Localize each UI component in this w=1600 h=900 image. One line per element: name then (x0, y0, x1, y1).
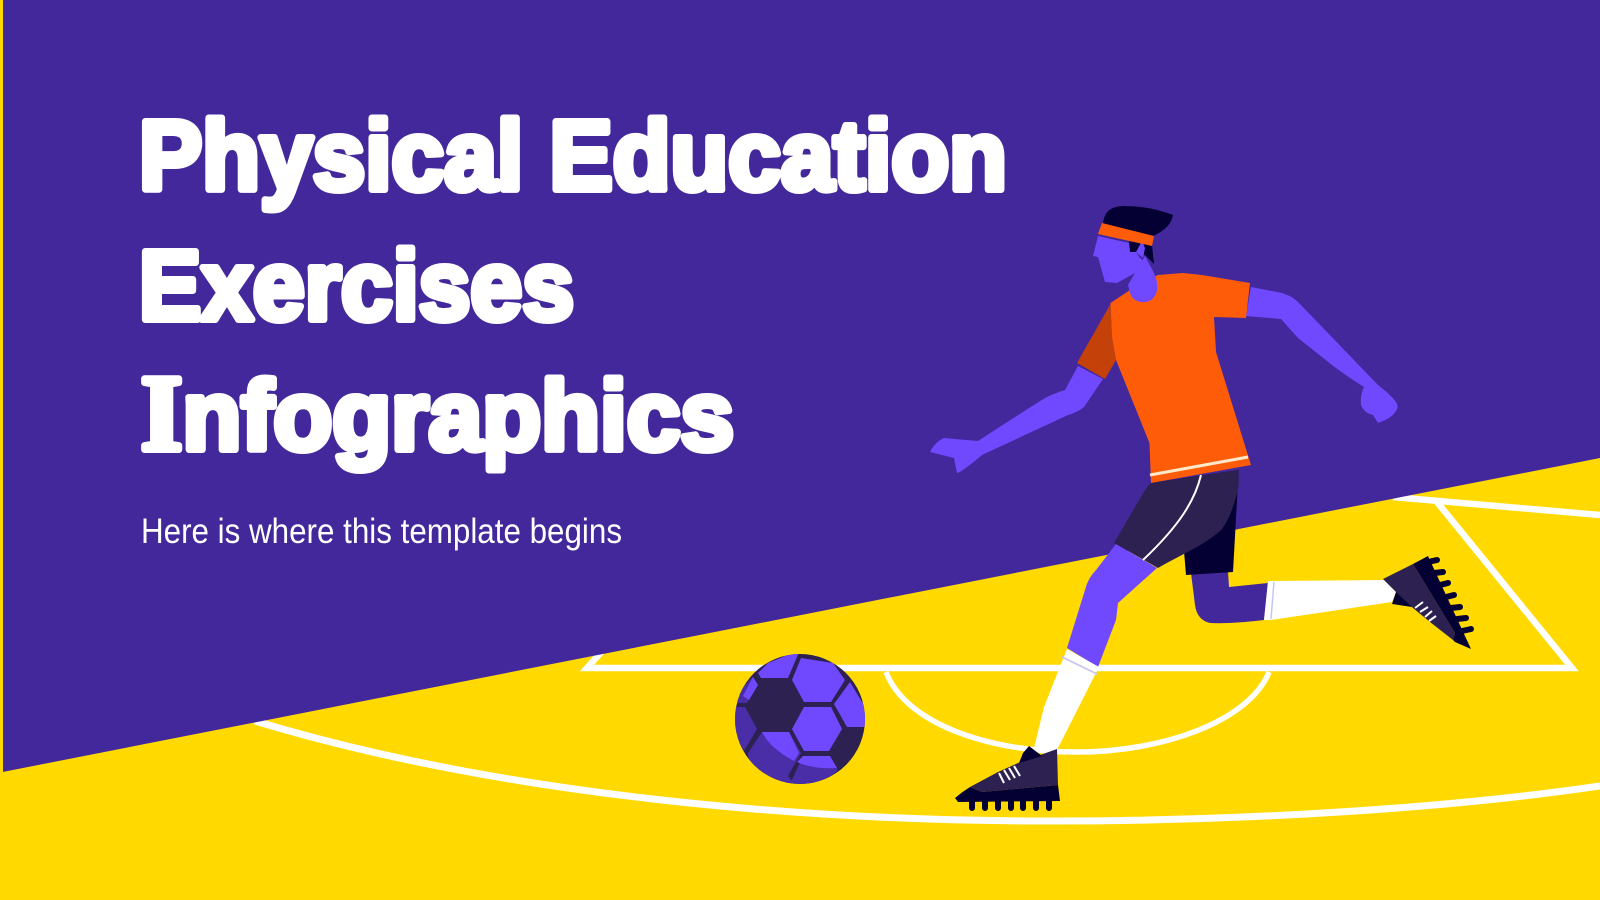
back of head hair (1129, 241, 1154, 264)
title (139, 100, 1007, 474)
ear (1136, 241, 1145, 258)
front leg (1067, 544, 1157, 667)
front sock (1034, 649, 1099, 750)
headband (1098, 223, 1154, 246)
court lines (255, 497, 1600, 821)
front shoe (955, 746, 1060, 808)
shirt hem stripe (1150, 457, 1248, 475)
title: Exercises (139, 230, 574, 340)
orange shirt (1110, 273, 1251, 483)
title: Infographics (141, 354, 734, 474)
back leg (1191, 571, 1268, 623)
shorts (1114, 470, 1239, 575)
right arm (1246, 287, 1398, 423)
title: Physical Education (139, 100, 1007, 210)
back shoe (1383, 556, 1471, 649)
player (930, 206, 1471, 808)
neck (1128, 256, 1157, 302)
left arm (930, 366, 1103, 473)
subtitle: Here is where this template begins (141, 512, 622, 551)
soccer ball (735, 654, 865, 784)
back sock (1264, 580, 1396, 620)
face (1093, 236, 1145, 283)
hair (1103, 206, 1173, 236)
dark sleeve (1077, 304, 1116, 379)
